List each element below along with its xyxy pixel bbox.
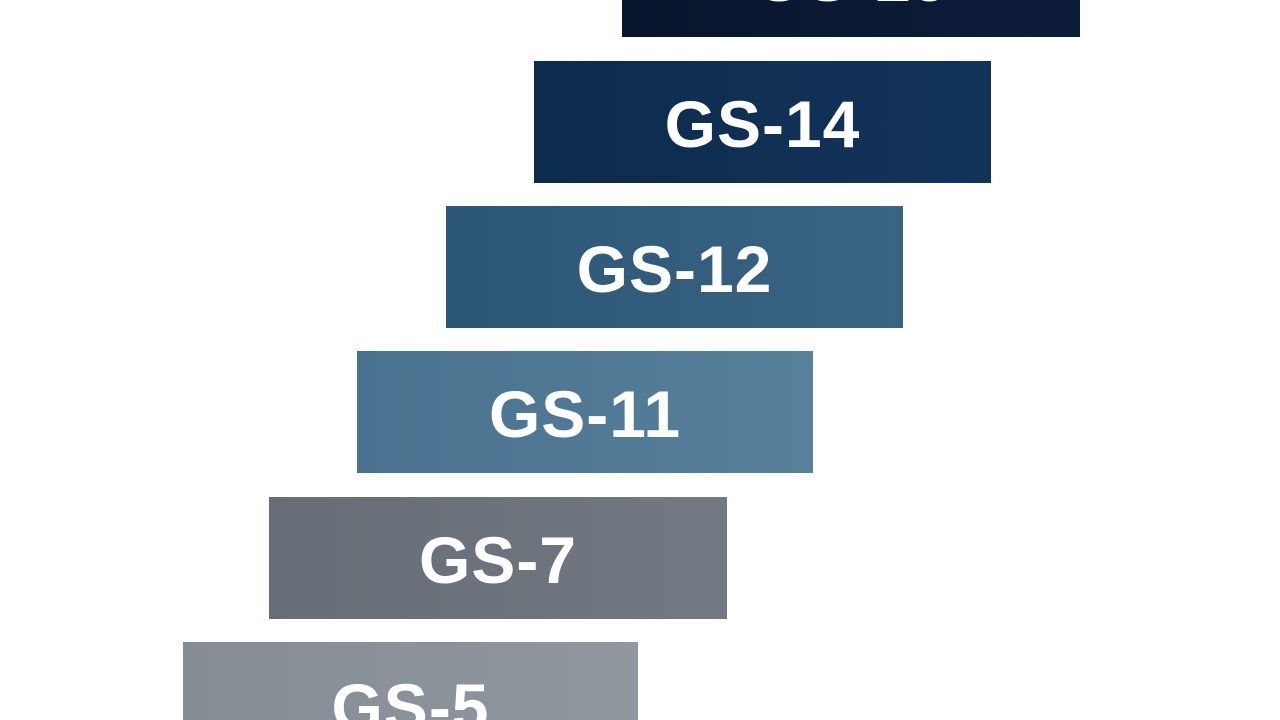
step: GS-7 — [269, 497, 727, 619]
step: GS-12: GS-12 — [577, 232, 772, 306]
step: GS-11 — [357, 351, 813, 473]
step: GS-14: GS-14 — [665, 87, 860, 161]
step: GS-15 — [622, 0, 1080, 37]
step: GS-7: GS-7 — [419, 523, 577, 597]
step: GS-5 — [183, 642, 638, 720]
step: GS-12 — [446, 206, 903, 328]
step: GS-14 — [534, 61, 991, 183]
step: GS-11: GS-11 — [489, 377, 681, 451]
